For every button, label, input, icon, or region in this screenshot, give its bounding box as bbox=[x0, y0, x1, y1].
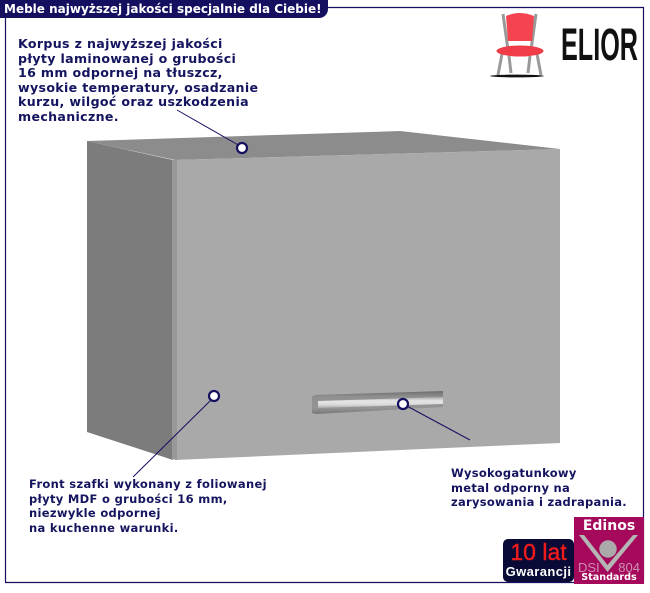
text: body: mechaniczne. bbox=[18, 109, 119, 124]
badge: warranty: 10 lat bbox=[510, 539, 567, 565]
callout: front bbox=[133, 391, 219, 477]
badge: standards: Edinos bbox=[583, 518, 635, 534]
cabinet side face bbox=[87, 141, 173, 460]
front edge highlight bbox=[172, 160, 177, 460]
text: body: Korpus z najwyższej jakości bbox=[18, 36, 223, 51]
text: front: Front szafki wykonany z foliowanej bbox=[29, 477, 267, 491]
text: front: płyty MDF o grubości 16 mm, bbox=[29, 492, 228, 506]
logo text: ELIOR bbox=[561, 19, 638, 70]
badge: standards bbox=[574, 517, 644, 584]
badge: standards: DSI bbox=[578, 560, 600, 575]
callout: handle bbox=[398, 399, 470, 440]
badge: standards: 804 bbox=[618, 560, 640, 575]
text: body bbox=[18, 36, 258, 124]
text: body: kurzu, wilgoć oraz uszkodzenia bbox=[18, 94, 249, 109]
text: body: wysokie temperatury, osadzanie bbox=[18, 80, 258, 95]
text: front: na kuchenne warunki. bbox=[29, 520, 179, 534]
text: body: płyty laminowanej o grubości bbox=[18, 51, 236, 66]
badge: warranty: Gwarancji bbox=[506, 564, 571, 579]
badge: warranty bbox=[503, 539, 574, 582]
cabinet top face bbox=[87, 131, 560, 160]
text: handle: zarysowania i zadrapania. bbox=[451, 495, 627, 509]
handle bbox=[312, 391, 443, 414]
text: handle: metal odporny na bbox=[451, 480, 570, 494]
callout: top bbox=[177, 110, 247, 153]
text: body: 16 mm odpornej na tłuszcz, bbox=[18, 65, 223, 80]
cabinet front bbox=[175, 149, 560, 460]
badge: standards: Standards bbox=[581, 572, 637, 583]
text: front: niezwykle odpornej bbox=[29, 506, 161, 520]
heading banner: Meble najwyższej jakości specjalnie dla Ciebie! bbox=[4, 2, 322, 16]
text: front bbox=[29, 477, 267, 534]
logo icon: chair bbox=[490, 13, 544, 78]
text: handle bbox=[451, 466, 627, 509]
text: handle: Wysokogatunkowy bbox=[451, 466, 577, 480]
